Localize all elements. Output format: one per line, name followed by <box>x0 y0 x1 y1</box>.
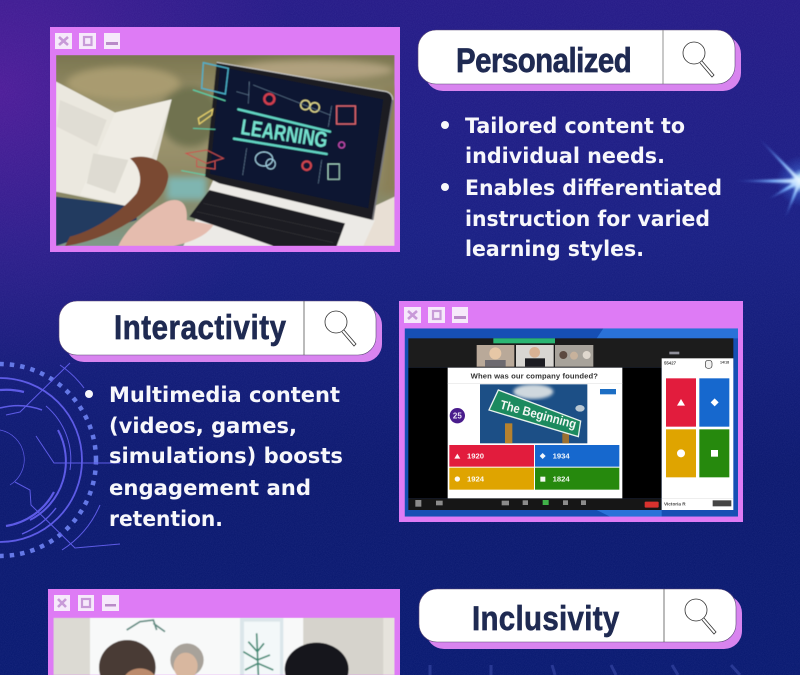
photo: video call quiz screenshot: 1920 <box>467 452 484 461</box>
decoration: light star flare <box>733 135 800 221</box>
text block: personalized bullets: instruction for varied <box>465 207 710 231</box>
photo: laptop showing learning: LEARNING <box>239 114 329 153</box>
text block: interactivity bullet <box>85 383 343 531</box>
icon: magnifier <box>685 599 716 634</box>
decoration: circuit rings <box>0 363 120 556</box>
photo: video call quiz screenshot: The Beginning <box>499 398 578 432</box>
icon: window controls <box>54 595 119 611</box>
text block: interactivity bullet: retention. <box>109 507 223 531</box>
heading: personalized: Personalized <box>456 41 632 79</box>
heading: inclusivity: Inclusivity <box>472 599 620 637</box>
text block: interactivity bullet: Multimedia content <box>109 383 340 407</box>
text block: personalized bullets: Enables differentiated <box>465 176 722 200</box>
text block: personalized bullets: Tailored content to <box>465 114 685 138</box>
search bar: inclusivity <box>419 589 742 649</box>
photo: video call quiz screenshot: 1934 <box>553 452 570 461</box>
photo: laptop showing learning <box>56 55 397 246</box>
text block: interactivity bullet: engagement and <box>109 476 311 500</box>
search bar: interactivity <box>59 301 382 362</box>
text block: personalized bullets: learning styles. <box>465 237 644 261</box>
panel: interactivity image window <box>399 301 743 522</box>
icon: magnifier <box>325 311 356 346</box>
photo: video call quiz screenshot <box>405 328 738 517</box>
icon: magnifier <box>683 42 714 77</box>
panel: inclusivity image window <box>48 589 400 675</box>
photo: video call quiz screenshot: 25 <box>453 412 462 421</box>
text block: interactivity bullet: simulations) boosts <box>109 444 343 468</box>
photo: video call quiz screenshot: 1824 <box>553 474 570 483</box>
photo: video call quiz screenshot: 1924 <box>467 475 485 484</box>
photo: video call quiz screenshot: 55427 <box>664 360 677 365</box>
photo: video call quiz screenshot: 14/18 <box>720 361 729 365</box>
decoration: faint rays <box>430 665 740 675</box>
icon: window controls <box>55 33 120 49</box>
heading: interactivity: Interactivity <box>114 308 286 346</box>
text block: personalized bullets: individual needs. <box>465 144 665 168</box>
photo: video call quiz screenshot: When was our company founded? <box>471 371 598 380</box>
icon: window controls <box>404 307 468 323</box>
panel: personalized image window <box>50 27 400 252</box>
photo: video call quiz screenshot: Victoria R <box>664 502 686 507</box>
search bar: personalized <box>418 30 741 91</box>
text block: interactivity bullet: (videos, games, <box>109 414 297 438</box>
photo: group of people in a bright room <box>53 618 395 675</box>
text block: personalized bullets <box>441 114 722 261</box>
